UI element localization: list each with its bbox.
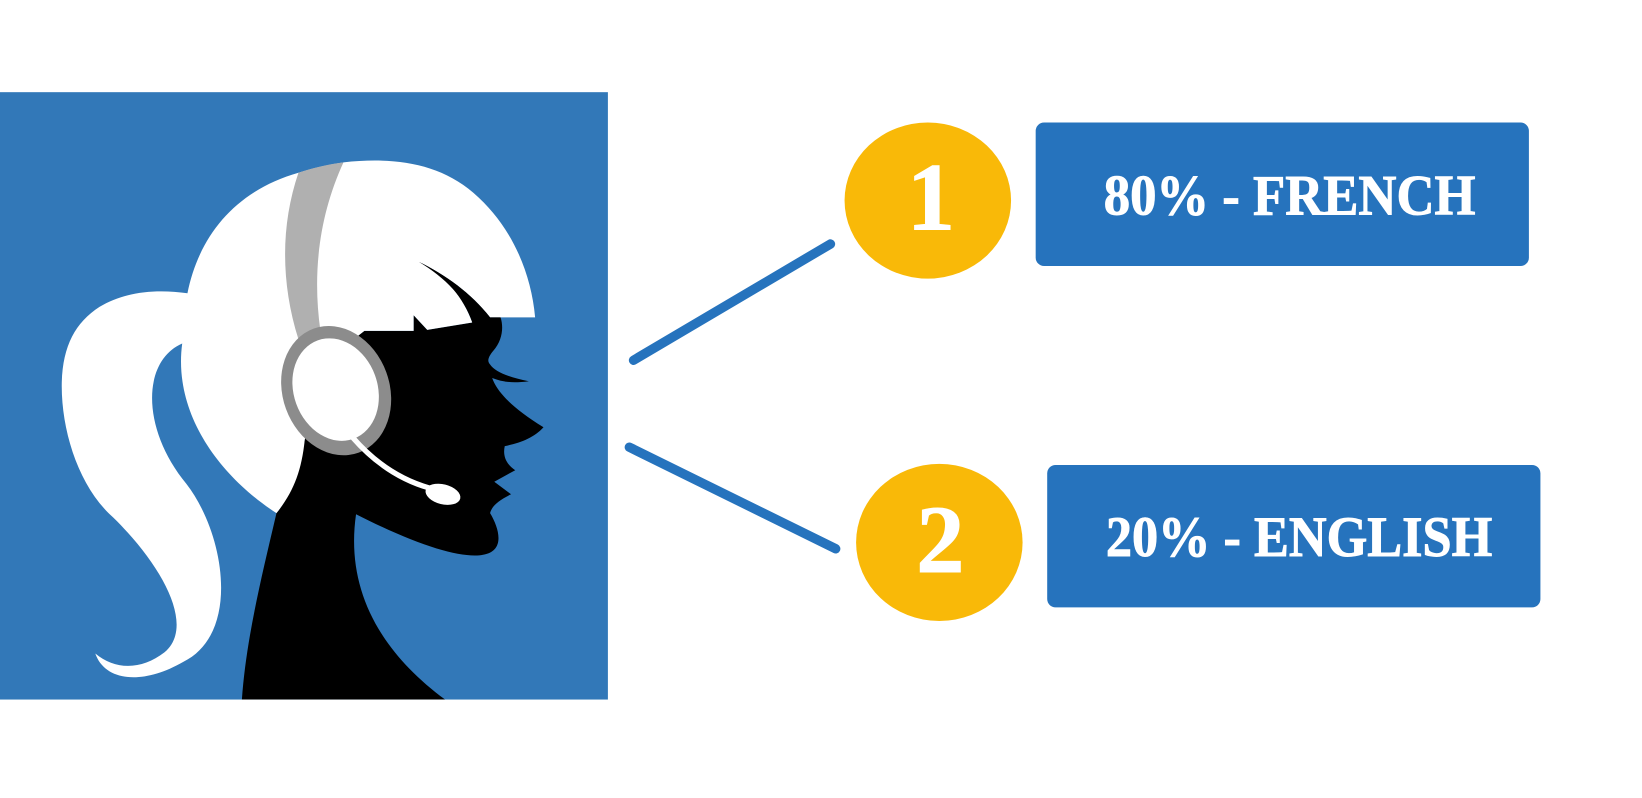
badge: number 2 <box>856 464 1023 621</box>
icon: white hair and ponytail <box>62 161 535 677</box>
label box: 80% French: 80% - FRENCH <box>1104 165 1475 228</box>
icon: headset ear cup <box>263 310 409 471</box>
badge: number 1 <box>845 123 1011 279</box>
label box: 20% English: 20% - ENGLISH <box>1106 506 1492 569</box>
connector line to item 2 <box>629 447 836 549</box>
label box: 80% French <box>1036 123 1529 266</box>
connector line to item 1 <box>634 244 830 360</box>
icon: headset microphone boom <box>353 438 463 508</box>
label box: 20% English <box>1047 465 1540 607</box>
badge: number 1: 1 <box>907 143 955 250</box>
icon: spike of black fringe <box>419 262 501 327</box>
icon: grey headband <box>285 162 343 339</box>
badge: number 2: 2 <box>916 486 964 593</box>
panel: blue square with headset agent illustration <box>0 92 608 700</box>
icon: black face and neck silhouette <box>242 262 543 700</box>
